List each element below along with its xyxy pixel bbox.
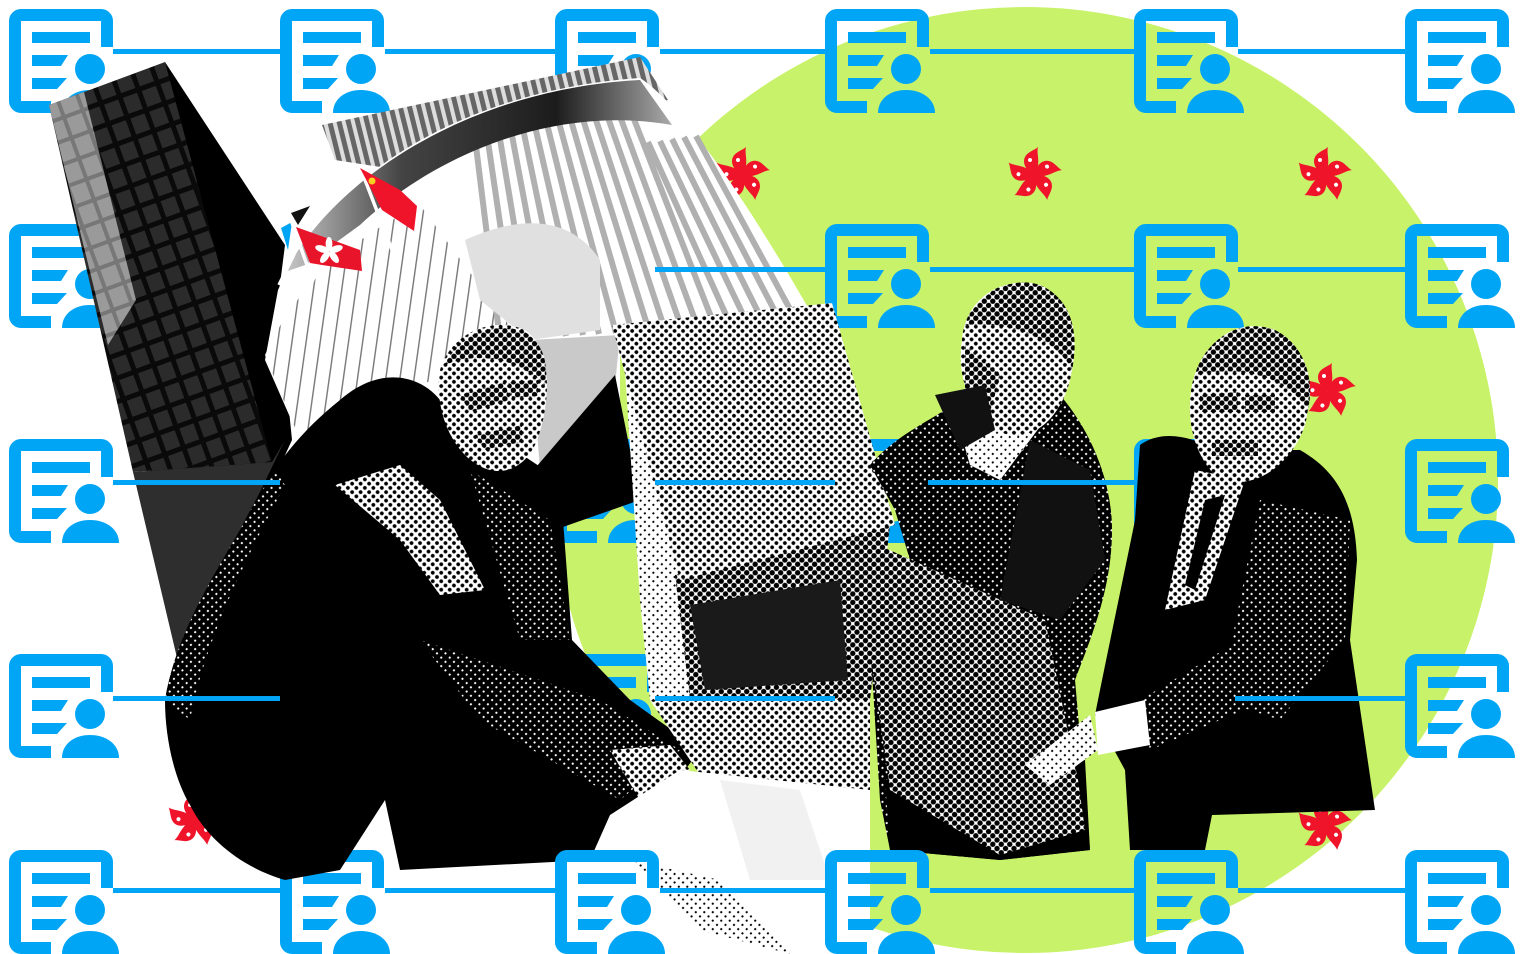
head [961,283,1074,435]
legislative building [265,57,815,490]
second man's facial shadows [460,380,538,450]
dotted jacket edge [165,470,285,720]
facade fins [474,109,797,340]
China flag [360,168,417,231]
head [1190,326,1309,482]
collar [960,420,1045,480]
bottom row profile icons [561,856,1244,954]
second man's jacket [470,470,570,640]
box left side [625,370,695,700]
roof arc [285,80,672,272]
blue sliver [281,222,292,250]
face shadow [965,345,1000,415]
lower trousers [885,760,1090,860]
arm and sleeve [420,640,680,800]
dark wedge [291,206,310,225]
ballot box [590,303,895,954]
bauhinia flower pattern [164,147,1356,854]
connector lines over the collage [113,267,1405,893]
second man's head [439,325,547,471]
paper in hand [1095,700,1150,755]
box interior [675,525,890,700]
briefcase panel [860,548,1085,855]
hand at face [935,385,995,450]
hair [1195,327,1310,410]
lower facade [530,335,620,470]
central window [465,223,600,340]
raised arm [525,375,640,528]
second man's hair [445,328,546,385]
facial shadows [1200,392,1275,456]
third man [870,282,1112,860]
fourth man [1025,326,1375,850]
flags [279,167,417,285]
tie [1185,495,1225,590]
hair [965,282,1075,370]
jacket shadow [1000,440,1105,620]
jacket texture [1220,500,1350,720]
box lower front [650,700,870,800]
left man, black jacket [165,325,700,880]
sleeve [1140,640,1290,750]
Hong Kong flag [296,227,362,271]
hand [1025,715,1098,785]
office tower [49,62,292,662]
hand [610,745,690,800]
shirt and tie [1165,470,1245,610]
first man's face and shirt [335,465,485,595]
box lid [612,303,895,580]
papers below box [590,770,870,954]
box slot dark area [690,580,848,690]
green circle [552,7,1498,953]
flagpoles [279,167,392,285]
